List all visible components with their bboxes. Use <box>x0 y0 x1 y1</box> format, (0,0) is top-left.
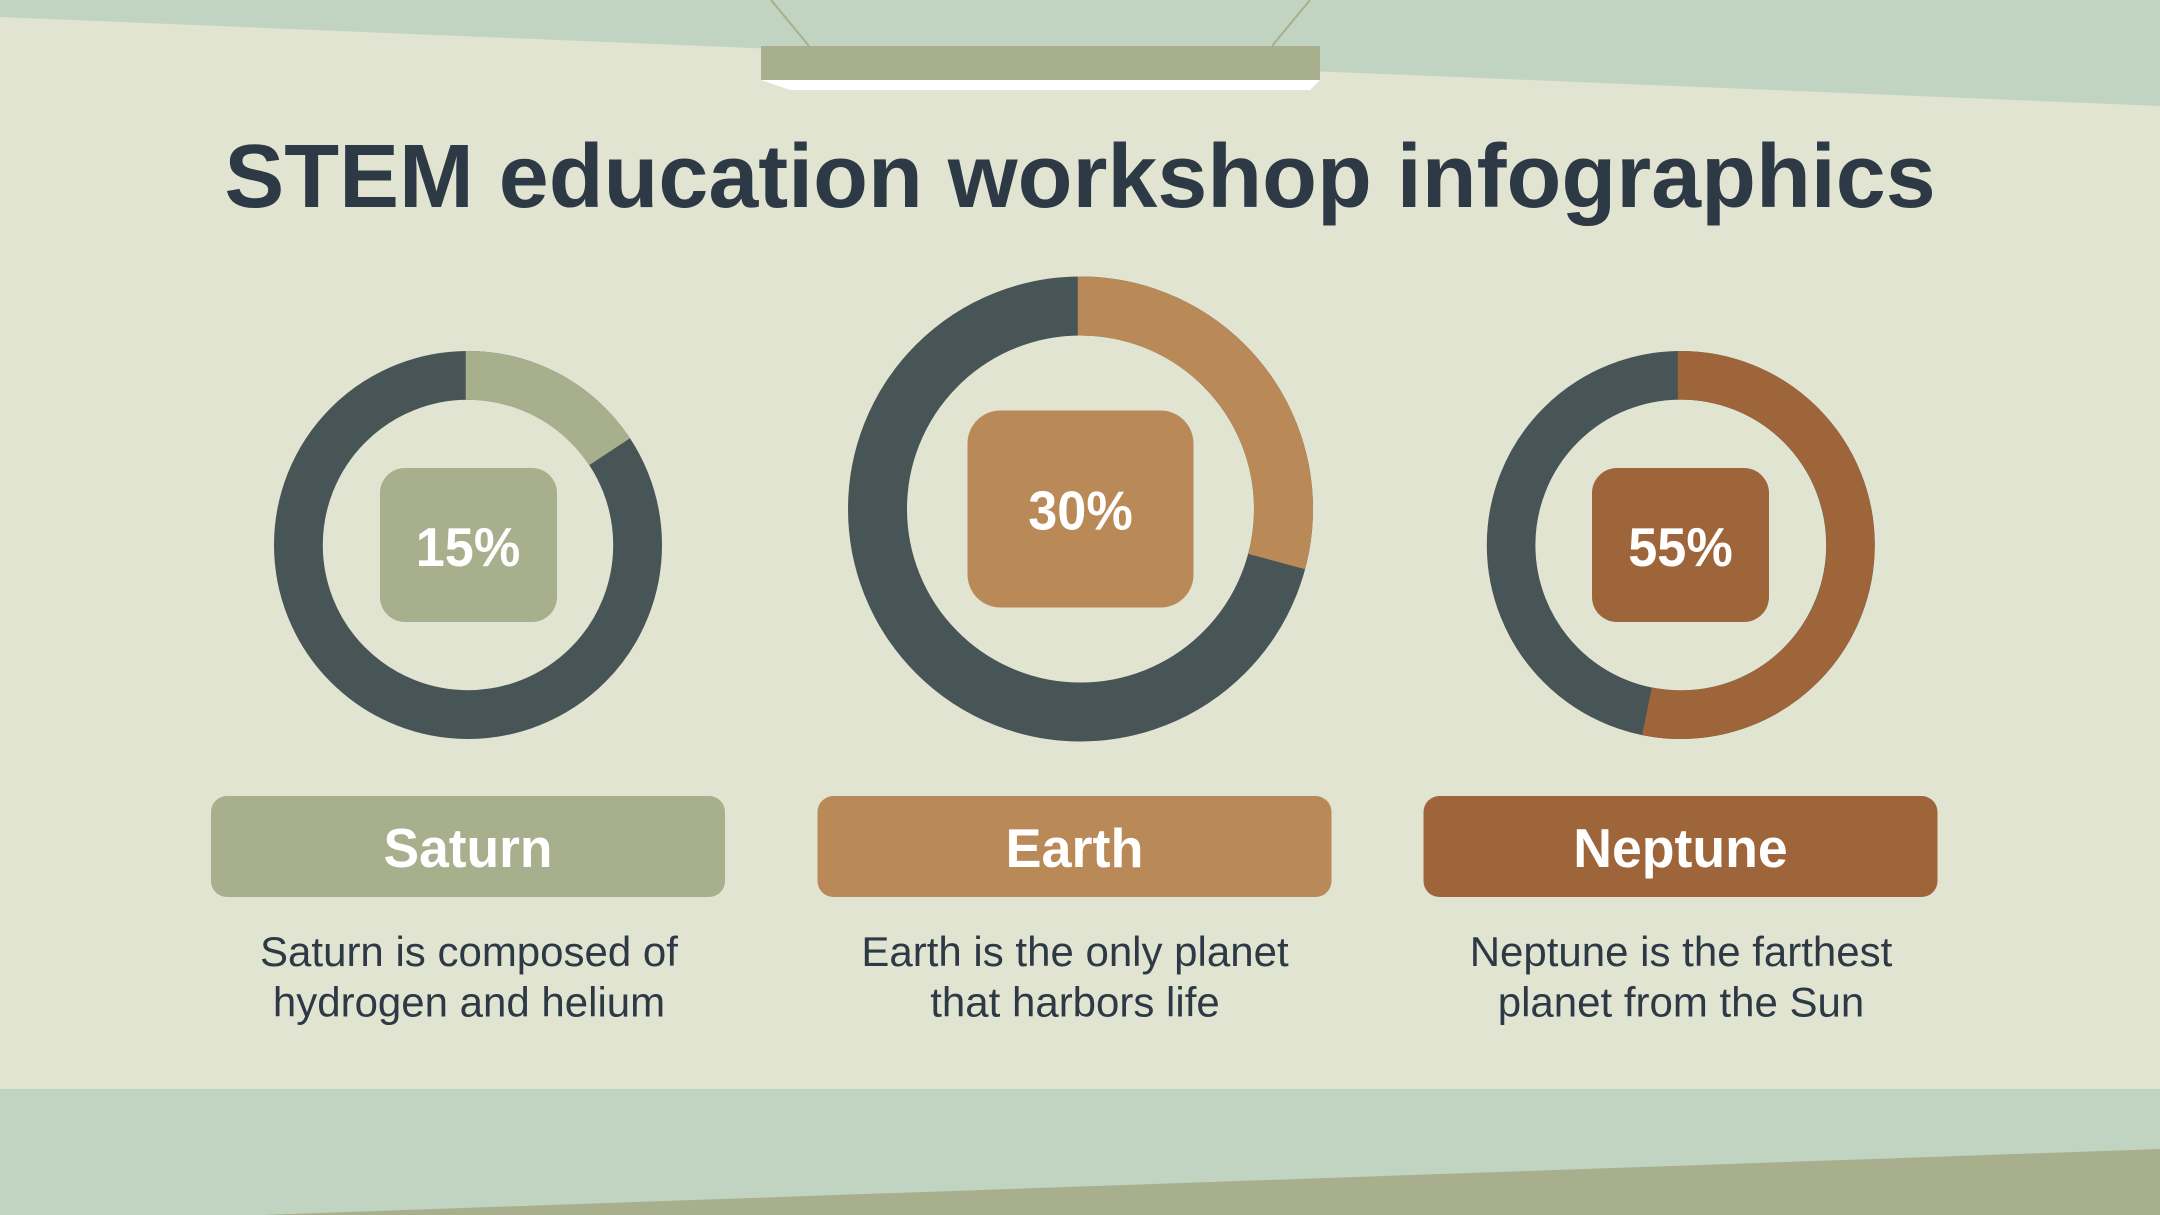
label: Saturn: Saturn <box>384 817 552 879</box>
panel: Saturn <box>211 351 725 1025</box>
donut chart: Earth 30% <box>878 276 1313 712</box>
label: Earth <box>818 796 1332 897</box>
description: Saturn: Saturn is composed of <box>260 928 678 975</box>
value badge: 30%: 30% <box>1028 480 1133 542</box>
description: Saturn: hydrogen and helium <box>273 978 665 1026</box>
value badge: 30% <box>968 410 1194 608</box>
value badge: 55% <box>1592 468 1769 622</box>
donut chart: Neptune 55% <box>1511 351 1875 739</box>
bottom background band <box>0 1089 2160 1215</box>
top background band <box>0 0 2160 106</box>
description: Neptune: Neptune is the farthest <box>1470 928 1893 975</box>
panel: Earth <box>818 276 1332 1026</box>
panel: Neptune <box>1424 351 1938 1025</box>
hanging ceiling lamp <box>761 0 1320 90</box>
description: Earth: that harbors life <box>930 978 1220 1026</box>
description: Neptune: planet from the Sun <box>1498 978 1864 1026</box>
value badge: 15%: 15% <box>416 516 520 578</box>
label: Earth: Earth <box>1006 817 1144 879</box>
value badge: 15% <box>380 468 557 622</box>
label: Neptune <box>1424 796 1938 897</box>
description: Saturn <box>260 928 678 1026</box>
label: Saturn <box>211 796 725 897</box>
description: Neptune <box>1470 928 1893 1026</box>
title: STEM education workshop infographics <box>224 127 1936 227</box>
value badge: 55%: 55% <box>1628 516 1733 578</box>
label: Neptune: Neptune <box>1573 817 1788 879</box>
donut chart: Saturn 15% <box>298 351 638 715</box>
description: Earth: Earth is the only planet <box>861 928 1289 975</box>
description: Earth <box>861 928 1289 1026</box>
